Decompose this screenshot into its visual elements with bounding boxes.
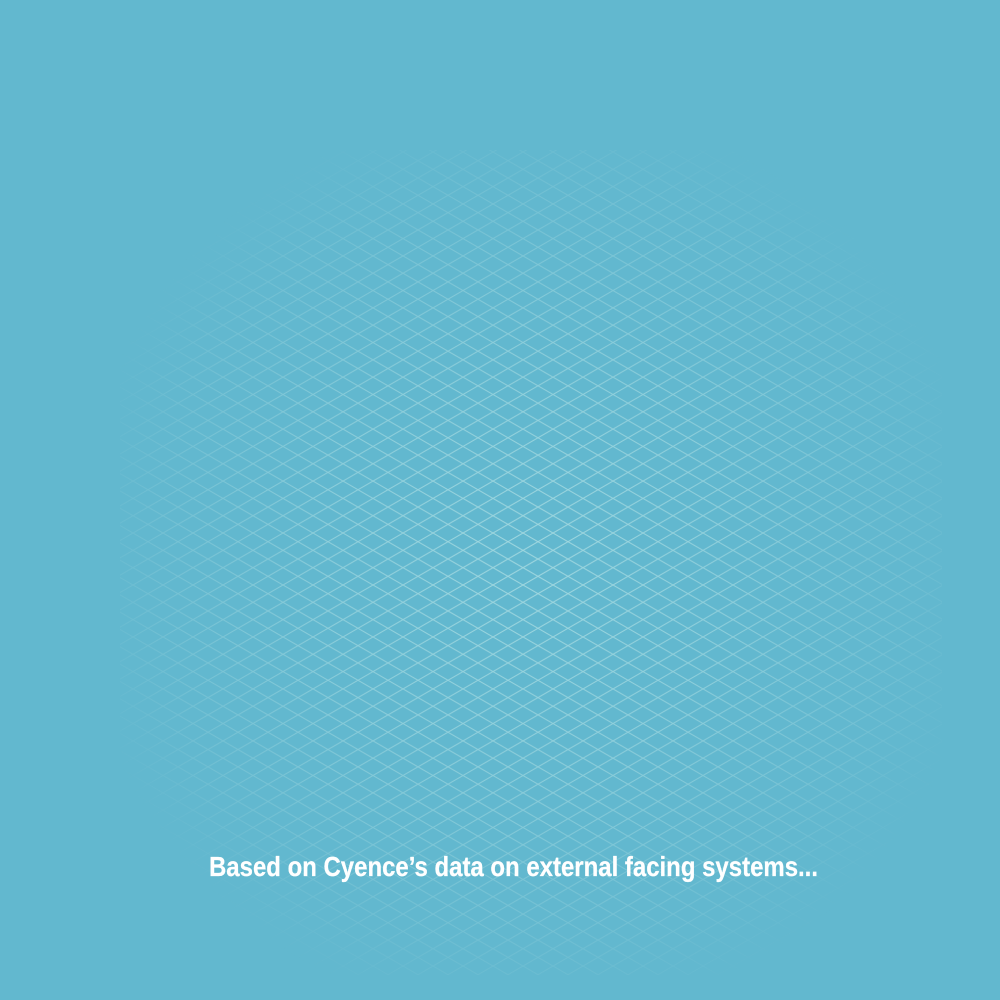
- panel: infographic background: [120, 150, 942, 975]
- lattice pattern: [120, 150, 942, 975]
- heading text: Based on Cyence’s data on external facing systems...: [209, 851, 818, 882]
